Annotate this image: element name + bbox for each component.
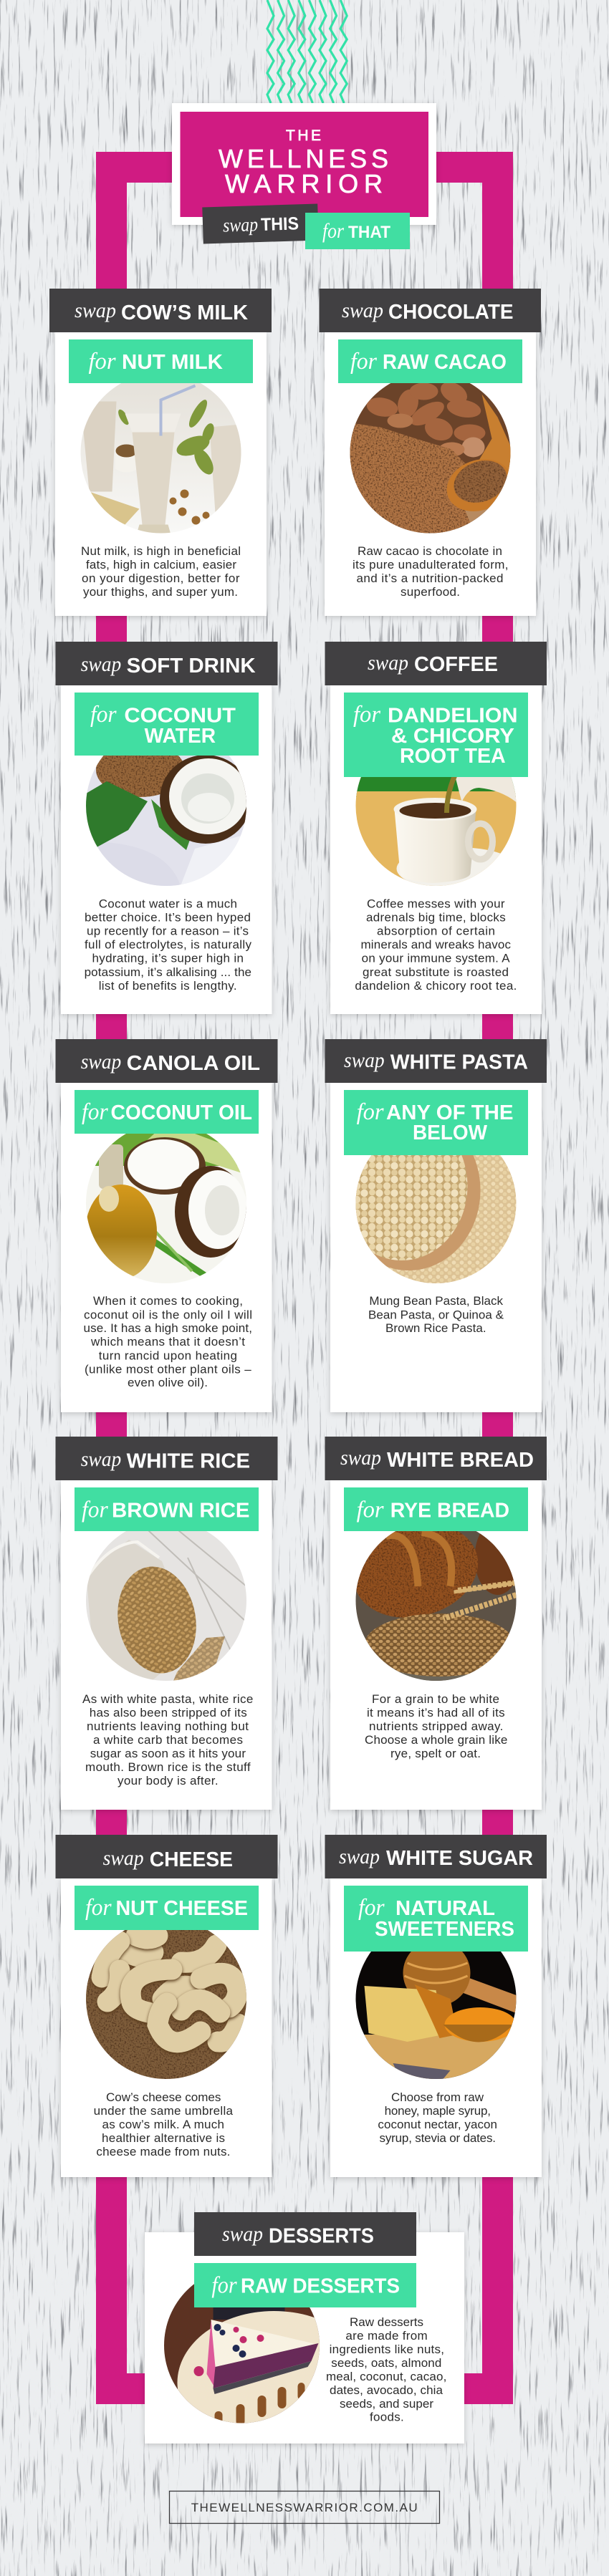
decorative green zigzag lines <box>267 0 347 103</box>
tag: swap this <box>202 203 319 244</box>
tag: for that: THAT <box>348 223 390 242</box>
body text: turn rancid upon heating <box>99 1349 237 1363</box>
body text: Choose a whole grain like <box>365 1733 507 1747</box>
heading: swap chocolate: CHOCOLATE <box>388 301 513 324</box>
label: for brown rice <box>75 1487 259 1531</box>
label: for dandelion and chicory root tea: & CHICORY <box>391 725 514 748</box>
body text: it means it’s had all of its <box>367 1706 505 1719</box>
body text: fats, high in calcium, easier <box>86 558 236 571</box>
label: for nut cheese <box>75 1886 259 1930</box>
heading: swap white bread <box>325 1437 547 1480</box>
photo: cashews on wood <box>86 1919 246 2079</box>
body text: your body is after. <box>118 1774 219 1788</box>
body text: superfood. <box>401 585 460 599</box>
body text: hydrating, it’s super high in <box>92 952 244 965</box>
panel: white rice <box>56 1437 278 1810</box>
body text: Raw cacao is chocolate in <box>358 544 502 558</box>
body text: ingredients like nuts, <box>330 2343 444 2356</box>
heading: swap white rice <box>56 1437 278 1480</box>
label: for nut cheese: for <box>85 1895 112 1921</box>
panel: chocolate <box>320 289 541 616</box>
body text: coconut nectar, yacon <box>378 2118 497 2131</box>
body text: honey, maple syrup, <box>385 2104 491 2118</box>
heading: swap white sugar <box>325 1835 547 1878</box>
body text: syrup, stevia or dates. <box>380 2131 496 2145</box>
body text: a white carb that becomes <box>93 1733 243 1747</box>
body text: which means that it doesn’t <box>90 1335 245 1349</box>
body text: up recently for a reason – it’s <box>87 925 249 938</box>
panel: cow's milk <box>49 289 272 616</box>
body text: Coffee messes with your <box>367 897 505 911</box>
body text: foods. <box>370 2411 404 2424</box>
heading: swap white pasta <box>325 1039 547 1083</box>
heading: swap cow's milk: swap <box>75 299 116 322</box>
body text: Nut milk, is high in beneficial <box>81 544 241 558</box>
body text: meal, coconut, cacao, <box>326 2370 446 2383</box>
body text: and it’s a nutrition-packed <box>357 571 503 585</box>
body text: your thighs, and super yum. <box>83 585 238 599</box>
body text <box>81 544 241 599</box>
heading: swap canola oil <box>56 1039 278 1083</box>
title text: WARRIOR <box>225 169 383 198</box>
body text: are made from <box>345 2329 428 2343</box>
body text: full of electrolytes, is naturally <box>85 938 252 952</box>
tag: swap this: swap <box>223 213 259 236</box>
body text: healthier alternative is <box>102 2131 225 2145</box>
photo: brown rice in scoop <box>86 1520 246 1681</box>
heading: swap coffee: swap <box>368 651 408 675</box>
heading: swap soft drink <box>56 642 278 685</box>
heading: swap cow's milk: COW’S MILK <box>121 302 248 324</box>
heading: swap white bread: WHITE BREAD <box>387 1449 534 1472</box>
body text: As with white pasta, white rice <box>82 1692 253 1706</box>
label: for dandelion and chicory root tea: DANDELION <box>388 705 517 728</box>
pink connecting frame <box>96 152 513 2404</box>
body text: Coconut water is a much <box>99 897 237 911</box>
heading: swap soft drink: SOFT DRINK <box>127 655 256 677</box>
body text: on your digestion, better for <box>82 571 240 585</box>
heading: swap white bread: swap <box>340 1446 381 1470</box>
panel: desserts <box>145 2212 464 2454</box>
label: for any of the below: ANY OF THE <box>386 1101 513 1124</box>
label: for natural sweeteners <box>344 1886 528 1952</box>
heading: swap desserts <box>194 2212 416 2256</box>
body text <box>85 897 251 993</box>
heading: swap coffee: COFFEE <box>414 653 498 676</box>
body text: When it comes to cooking, <box>93 1294 243 1308</box>
photo: coconut water <box>86 756 246 886</box>
body text <box>326 2315 446 2424</box>
body text: on your immune system. A <box>362 952 510 965</box>
body text: Mung Bean Pasta, Black <box>369 1294 503 1308</box>
body text: coconut oil is the only oil I will <box>84 1308 252 1321</box>
body text: minerals and wreaks havoc <box>361 938 512 952</box>
body text: under the same umbrella <box>94 2104 234 2118</box>
label: for coconut water: COCONUT <box>124 705 236 728</box>
body text: nutrients stripped away. <box>369 1719 503 1733</box>
heading: swap canola oil: CANOLA OIL <box>127 1052 260 1075</box>
body text: mouth. Brown rice is the stuff <box>85 1760 251 1774</box>
body text: better choice. It’s been hyped <box>85 910 251 924</box>
label: for raw desserts: for <box>211 2273 237 2299</box>
body text: its pure unadulterated form, <box>353 558 509 571</box>
heading: swap white sugar: swap <box>339 1845 380 1868</box>
panel: cheese <box>56 1835 278 2177</box>
heading: swap cow's milk <box>49 289 272 332</box>
body text: great substitute is roasted <box>363 965 509 979</box>
label: for raw cacao: for <box>350 349 377 375</box>
heading: swap white pasta: WHITE PASTA <box>390 1051 528 1074</box>
label: for brown rice: BROWN RICE <box>112 1500 249 1523</box>
panel: white pasta <box>325 1039 547 1412</box>
body text: cheese made from nuts. <box>96 2145 230 2158</box>
body text <box>94 2090 234 2158</box>
body text: has also been stripped of its <box>90 1706 247 1719</box>
heading: swap cheese: CHEESE <box>150 1848 233 1871</box>
heading: swap chocolate: swap <box>342 299 383 322</box>
footer: website link box: THEWELLNESSWARRIOR.COM.AU <box>191 2501 418 2514</box>
heading: swap cheese <box>56 1835 278 1878</box>
label: for raw desserts <box>194 2263 416 2307</box>
heading: swap canola oil: swap <box>81 1050 121 1074</box>
label: for raw desserts: RAW DESSERTS <box>241 2274 400 2297</box>
label: for dandelion and chicory root tea: ROOT TEA <box>400 745 506 768</box>
label: for any of the below: BELOW <box>413 1121 488 1144</box>
body text: rye, spelt or oat. <box>390 1747 481 1760</box>
body text: adrenals big time, blocks <box>366 910 506 924</box>
tag: swap this: THIS <box>261 213 299 235</box>
photo: nut milk glasses <box>80 372 241 534</box>
photo: rye bread and grain <box>355 1531 516 1681</box>
panel: white sugar <box>325 1835 547 2177</box>
body text: nutrients leaving nothing but <box>87 1719 249 1733</box>
title panel <box>172 103 436 249</box>
body text <box>365 1692 507 1760</box>
label: for natural sweeteners: SWEETENERS <box>375 1918 514 1941</box>
label: for rye bread: for <box>357 1497 384 1523</box>
photo: raw cacao <box>350 383 510 533</box>
photo: tea pouring into cup <box>355 777 516 886</box>
label: for nut milk <box>69 339 253 383</box>
body text <box>83 1294 252 1389</box>
label: for coconut water: for <box>90 702 117 728</box>
heading: swap white sugar: WHITE SUGAR <box>386 1847 533 1870</box>
body text: dates, avocado, chia <box>330 2383 443 2397</box>
label: for coconut water <box>75 693 259 756</box>
body text: For a grain to be white <box>372 1692 499 1706</box>
body text <box>82 1692 253 1788</box>
label: for brown rice: for <box>82 1497 108 1523</box>
heading: swap white rice: swap <box>81 1447 121 1471</box>
label: for coconut oil <box>75 1090 259 1134</box>
label: for raw cacao: RAW CACAO <box>383 351 507 374</box>
title text: WELLNESS <box>219 144 388 173</box>
label: for natural sweeteners: NATURAL <box>395 1897 495 1920</box>
label: for coconut oil: COCONUT OIL <box>110 1101 252 1124</box>
heading: swap desserts: DESSERTS <box>269 2224 374 2247</box>
tag: for that <box>305 213 410 249</box>
body text: sugar as soon as it hits your <box>90 1747 246 1760</box>
body text: as cow’s milk. A much <box>102 2118 224 2131</box>
photo: quinoa in wooden bowl <box>355 1155 516 1283</box>
heading: swap white pasta: swap <box>344 1048 385 1072</box>
heading: swap desserts: swap <box>222 2222 263 2246</box>
photo: raw dessert cake slice <box>162 2265 371 2454</box>
body text: seeds, oats, almond <box>331 2356 441 2370</box>
body text: Brown Rice Pasta. <box>385 1321 486 1335</box>
photo: coconut oil bottle and coconuts <box>85 1123 247 1283</box>
photo: honey dipper and honeycomb <box>355 1919 516 2079</box>
body text <box>355 897 517 993</box>
body text: (unlike most other plant oils – <box>85 1362 251 1376</box>
label: for any of the below <box>344 1090 528 1155</box>
body text <box>378 2090 497 2145</box>
tag: for that: for <box>322 219 344 243</box>
body text: even olive oil). <box>128 1376 208 1389</box>
panel: soft drink <box>56 642 278 1014</box>
title text <box>219 127 388 198</box>
body text <box>368 1294 504 1335</box>
label: for nut milk: NUT MILK <box>122 351 223 374</box>
panel: canola oil <box>56 1039 278 1412</box>
body text: use. It has a high smoke point, <box>83 1321 252 1335</box>
heading: swap white rice: WHITE RICE <box>127 1449 250 1472</box>
body text: Raw desserts <box>350 2315 423 2329</box>
heading: swap chocolate <box>320 289 541 332</box>
label: for natural sweeteners: for <box>358 1895 385 1921</box>
body text: seeds, and super <box>340 2397 433 2411</box>
body text: absorption of certain <box>377 925 495 938</box>
footer: website link box <box>169 2491 440 2524</box>
label: for nut cheese: NUT CHEESE <box>116 1897 248 1920</box>
label: for any of the below: for <box>357 1099 384 1125</box>
title text: THE <box>286 127 321 144</box>
heading: swap cheese: swap <box>103 1846 144 1870</box>
body text: dandelion & chicory root tea. <box>355 979 517 993</box>
panel: white bread <box>325 1437 547 1810</box>
body text: Cow’s cheese comes <box>106 2090 221 2104</box>
label: for coconut oil: for <box>82 1099 108 1125</box>
heading: swap soft drink: swap <box>81 652 121 676</box>
panel: coffee <box>325 642 547 1014</box>
body text <box>353 544 509 599</box>
body text: Bean Pasta, or Quinoa & <box>368 1308 504 1321</box>
heading: swap coffee <box>325 642 547 685</box>
label: for dandelion and chicory root tea: for <box>353 702 380 728</box>
label: for rye bread: RYE BREAD <box>390 1500 509 1523</box>
body text: Choose from raw <box>391 2090 484 2104</box>
body text: potassium, it’s alkalising ... the <box>85 965 251 979</box>
label: for raw cacao <box>338 339 522 383</box>
label: for coconut water: WATER <box>145 725 216 748</box>
label: for dandelion and chicory root tea <box>344 693 528 777</box>
label: for nut milk: for <box>89 349 116 375</box>
body text: list of benefits is lengthy. <box>99 979 237 993</box>
label: for rye bread <box>344 1487 528 1531</box>
